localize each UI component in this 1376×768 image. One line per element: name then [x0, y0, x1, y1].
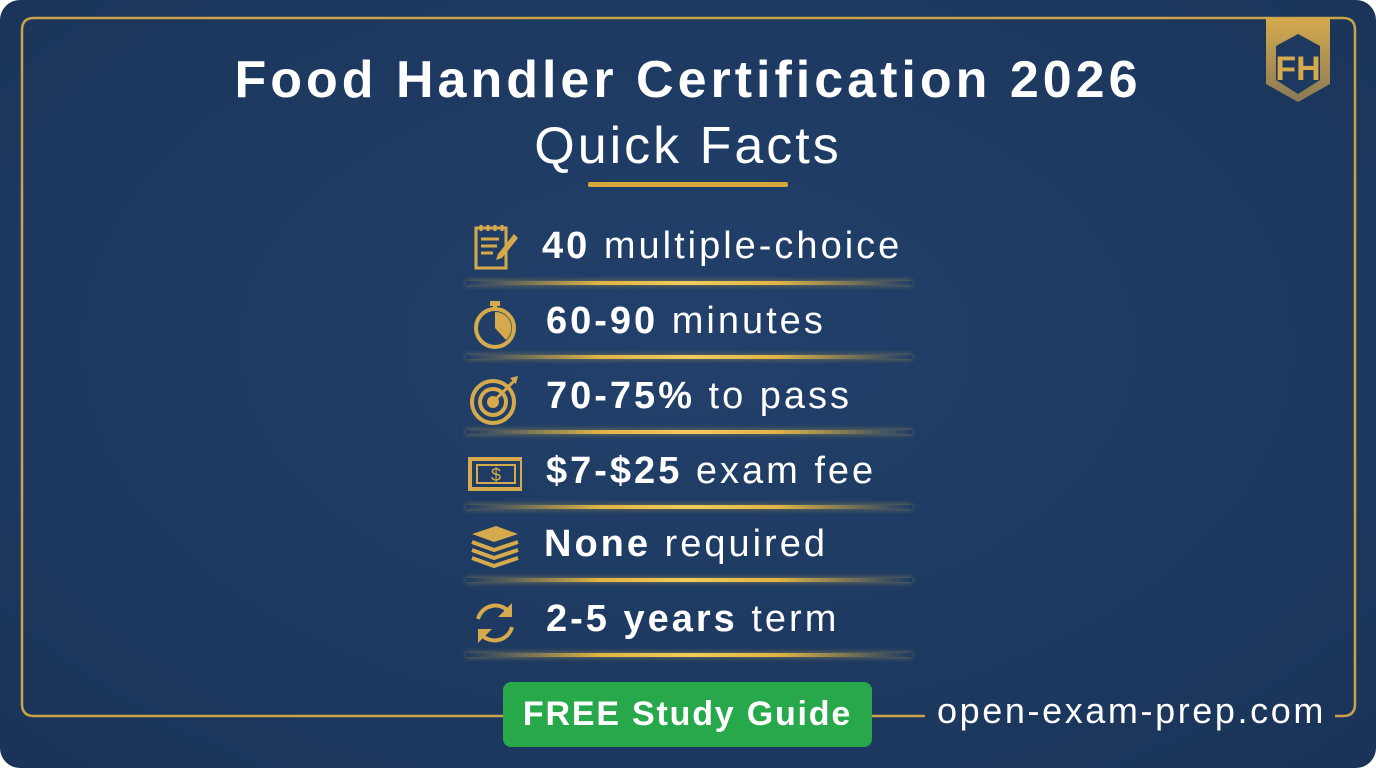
icon: renew arrows — [476, 603, 514, 643]
subtitle: Quick Facts — [534, 117, 842, 175]
title: Food Handler Certification 2026 — [234, 51, 1142, 109]
fact: prerequisites: None required — [544, 523, 828, 565]
icon: books — [471, 526, 519, 568]
fact: pass: 70-75% to pass — [546, 375, 852, 417]
url: open-exam-prep.com — [937, 690, 1326, 731]
underline — [588, 182, 788, 187]
icon: stopwatch — [474, 301, 516, 349]
logo — [1266, 18, 1330, 102]
fact: time: 60-90 minutes — [546, 300, 826, 342]
fact: fee: $7-$25 exam fee — [546, 450, 876, 492]
fact: time — [474, 300, 826, 349]
logo: FH — [1275, 50, 1321, 88]
fact: term: 2-5 years term — [546, 598, 839, 640]
fact: pass — [470, 375, 852, 425]
fact: questions: 40 multiple-choice — [542, 225, 902, 267]
icon: banknote: $ — [491, 465, 501, 485]
button: free study guide — [503, 682, 872, 747]
button: free study guide: FREE Study Guide — [523, 695, 852, 733]
icon: notepad — [474, 225, 518, 270]
icon: banknote — [468, 457, 522, 491]
icon: target — [470, 376, 518, 425]
